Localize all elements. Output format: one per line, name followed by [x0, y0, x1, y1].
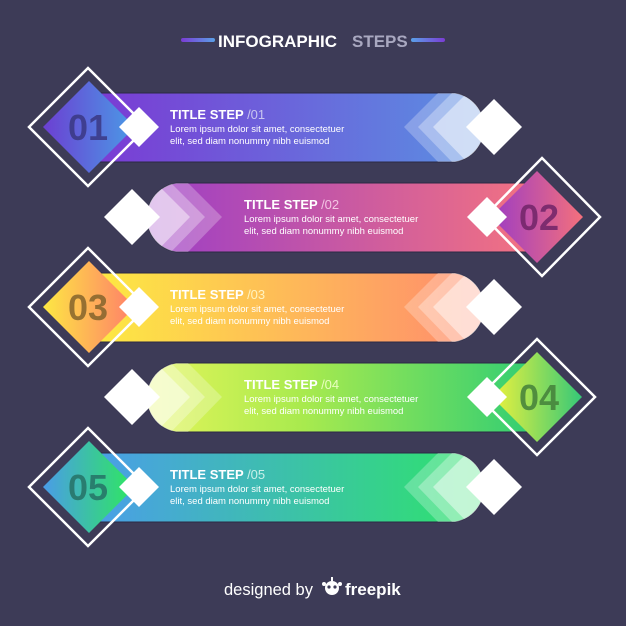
title — [181, 32, 445, 51]
step 01: TITLE STEP /01 — [170, 107, 265, 122]
title: INFOGRAPHIC — [218, 32, 337, 51]
step 01 — [29, 68, 522, 186]
step 01: 01 — [68, 107, 108, 148]
icon: freepik mascot — [322, 577, 342, 595]
step 02: elit, sed diam nonummy nibh euismod — [244, 226, 403, 237]
step 05 — [29, 428, 522, 546]
title: STEPS — [352, 32, 408, 51]
step 01: elit, sed diam nonummy nibh euismod — [170, 136, 329, 147]
step 05: 05 — [68, 467, 108, 508]
step 04 — [104, 339, 595, 455]
step 04: elit, sed diam nonummy nibh euismod — [244, 406, 403, 417]
step 02: TITLE STEP /02 — [244, 197, 339, 212]
step 05: TITLE STEP /05 — [170, 467, 265, 482]
step 04: TITLE STEP /04 — [244, 377, 339, 392]
step 04: Lorem ipsum dolor sit amet, consectetuer — [244, 394, 418, 405]
step 02: 02 — [519, 197, 559, 238]
step 03: TITLE STEP /03 — [170, 287, 265, 302]
step 05: elit, sed diam nonummy nibh euismod — [170, 496, 329, 507]
step 04: 04 — [519, 377, 559, 418]
footer credit: freepik — [345, 580, 401, 599]
step 03: Lorem ipsum dolor sit amet, consectetuer — [170, 304, 344, 315]
step 02 — [104, 158, 600, 276]
step 05: Lorem ipsum dolor sit amet, consectetuer — [170, 484, 344, 495]
step 01: Lorem ipsum dolor sit amet, consectetuer — [170, 124, 344, 135]
step 03: 03 — [68, 287, 108, 328]
step 02: Lorem ipsum dolor sit amet, consectetuer — [244, 214, 418, 225]
step 03: elit, sed diam nonummy nibh euismod — [170, 316, 329, 327]
step 03 — [29, 248, 522, 366]
footer credit — [224, 577, 401, 599]
footer credit: designed by — [224, 581, 314, 599]
